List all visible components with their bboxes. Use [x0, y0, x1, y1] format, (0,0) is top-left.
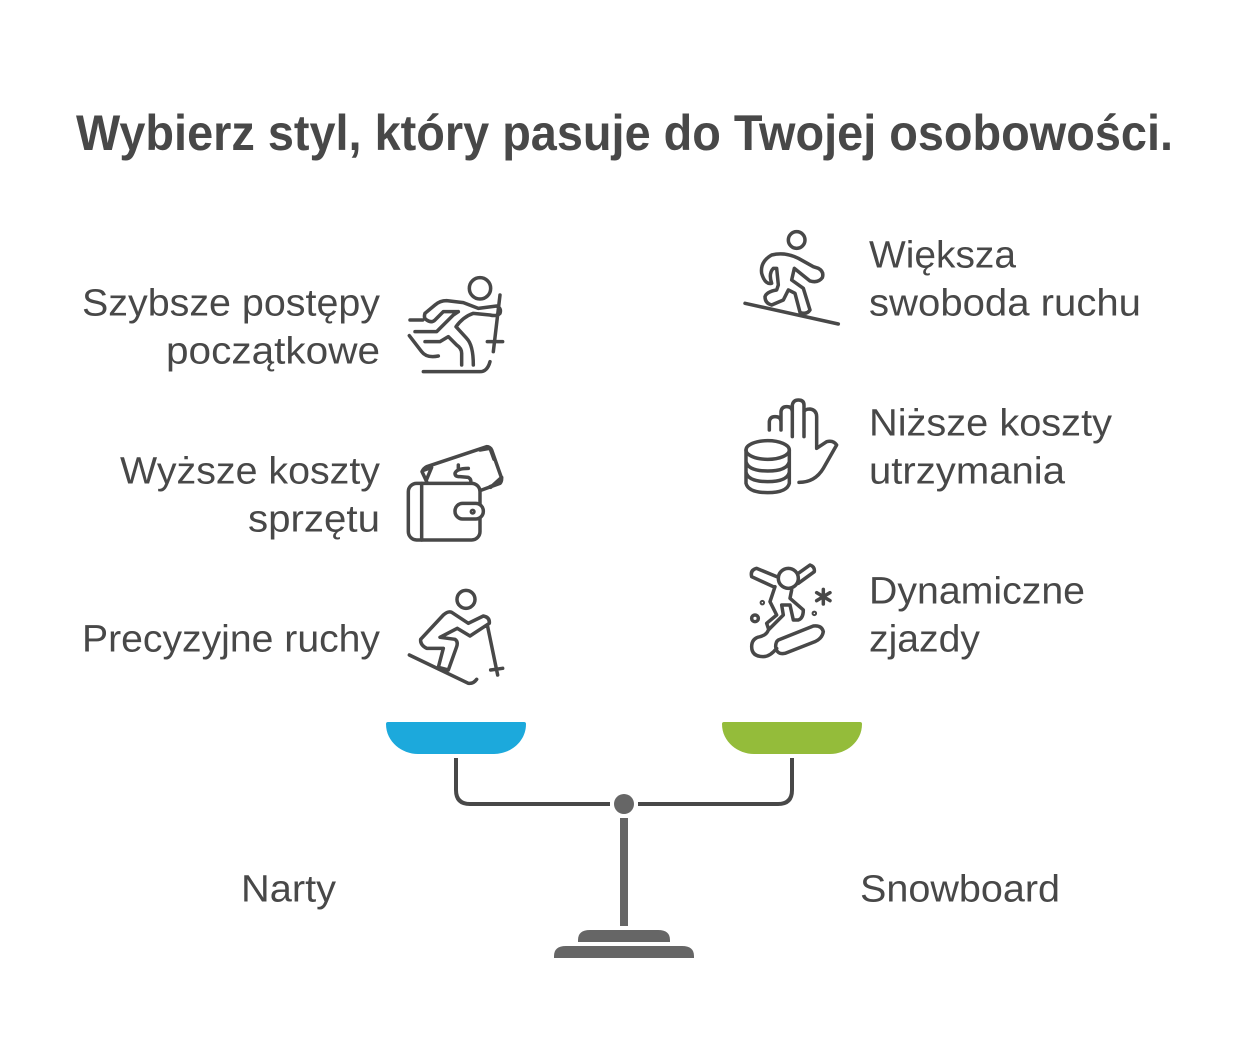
- text: większa swoboda ruchu: swoboda ruchu: [869, 282, 1141, 324]
- text: dynamiczne zjazdy: [869, 570, 1085, 660]
- text: precyzyjne ruchy: Precyzyjne ruchy: [82, 618, 380, 660]
- text: większa swoboda ruchu: [869, 234, 1141, 324]
- right pan: [722, 722, 862, 754]
- right arm: [638, 758, 792, 804]
- text: wyższe koszty sprzętu: Wyższe koszty: [120, 450, 380, 492]
- upper base: [578, 930, 670, 942]
- text: szybsze postępy początkowe: [82, 282, 380, 372]
- icon: wallet with banknote: [408, 447, 502, 540]
- lower base: [554, 946, 694, 958]
- icon: jumping snowboarder: [751, 565, 830, 657]
- text: większa swoboda ruchu: Większa: [869, 234, 1017, 276]
- icon: hand with coin stack: [746, 400, 837, 493]
- panel: snowboard (right column): [745, 232, 1141, 660]
- text: szybsze postępy początkowe: początkowe: [166, 330, 380, 372]
- balance scale: [386, 722, 862, 958]
- text: niższe koszty utrzymania: [869, 402, 1112, 492]
- text: wyższe koszty sprzętu: sprzętu: [248, 498, 380, 540]
- text: niższe koszty utrzymania: Niższe koszty: [869, 402, 1112, 444]
- icon: snowboarder on slope: [745, 232, 838, 324]
- text: dynamiczne zjazdy: zjazdy: [869, 618, 980, 660]
- post: [620, 818, 628, 926]
- text: szybsze postępy początkowe: Szybsze postępy: [82, 282, 380, 324]
- title: Wybierz styl, który pasuje do Twojej osobowości.: [76, 105, 1173, 161]
- icon: cross-country skier: [409, 278, 503, 372]
- pivot: [614, 794, 634, 814]
- left pan: [386, 722, 526, 754]
- left arm: [456, 758, 610, 804]
- icon: downhill skier: [409, 590, 503, 683]
- text: niższe koszty utrzymania: utrzymania: [869, 450, 1066, 492]
- text: dynamiczne zjazdy: Dynamiczne: [869, 570, 1085, 612]
- label: narty: Narty: [241, 868, 336, 910]
- text: wyższe koszty sprzętu: [120, 450, 380, 540]
- panel: narty (left column): [82, 278, 503, 683]
- label: snowboard: Snowboard: [860, 868, 1060, 910]
